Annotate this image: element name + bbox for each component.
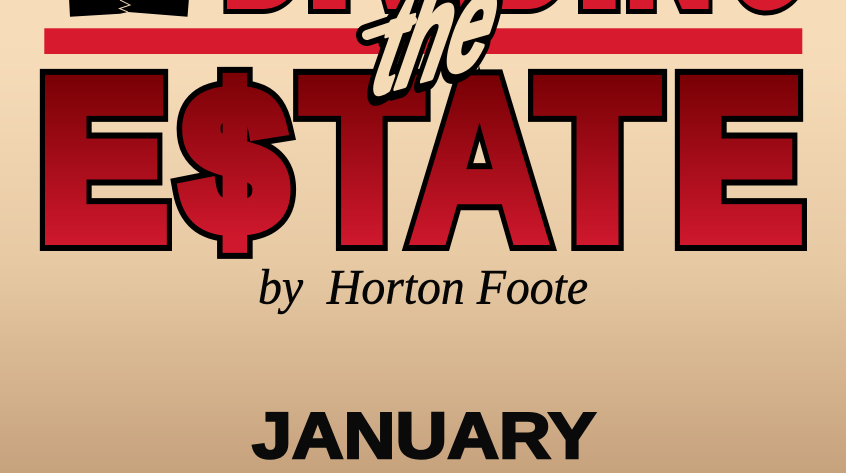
- date: JANUARY: JANUARY: [252, 399, 596, 472]
- title word: ESTATE: E: [39, 35, 167, 285]
- title word: ESTATE: T: [303, 35, 421, 285]
- title word: ESTATE: A: [410, 31, 549, 290]
- title word: ESTATE: $: [183, 48, 286, 273]
- title word: ESTATE: $: [183, 48, 286, 273]
- title word: ESTATE: T: [538, 35, 657, 285]
- title word: ESTATE: E: [39, 35, 167, 285]
- red horizontal bar: [44, 28, 802, 54]
- icon: torn black mask: [69, 0, 189, 17]
- title word: ESTATE: T: [303, 35, 421, 285]
- byline: by Horton Foote: [258, 258, 588, 314]
- title word: ESTATE: A: [410, 31, 549, 290]
- title word: ESTATE: E: [674, 35, 802, 285]
- title word: ESTATE: [39, 31, 802, 290]
- title word: DIVIDING: [223, 0, 804, 38]
- title word: ESTATE: E: [674, 35, 802, 285]
- title word: ESTATE: T: [538, 35, 657, 285]
